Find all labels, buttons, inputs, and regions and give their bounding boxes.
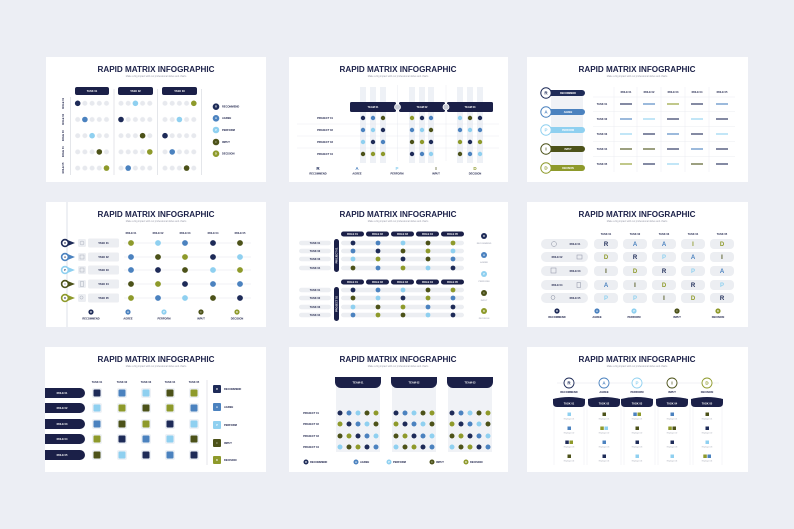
role circles	[560, 378, 713, 394]
legend pills	[541, 88, 585, 173]
legend: A	[215, 117, 217, 120]
legend pills: R	[544, 91, 548, 96]
task headers: TASK 01	[92, 380, 103, 384]
letter cells	[594, 239, 734, 303]
employee items: Employee 04	[632, 460, 642, 462]
legend: P	[395, 166, 399, 171]
legend: A	[483, 254, 485, 257]
legend: RECOMMEND	[477, 243, 492, 245]
letter cells: P	[662, 255, 666, 261]
employee items: Employee 01	[667, 418, 677, 420]
task headers	[601, 232, 728, 236]
title: RAPID MATRIX INFOGRAPHIC	[340, 355, 457, 364]
title: RAPID MATRIX INFOGRAPHIC	[98, 65, 215, 74]
role pills: ROLE 04	[552, 283, 563, 287]
legend: DECISION	[712, 315, 724, 319]
project labels: PROJECT 04	[303, 445, 319, 449]
letter cells: P	[633, 296, 637, 302]
letter cells: P	[720, 283, 724, 289]
legend: INPUT	[673, 315, 681, 319]
employee items: Employee 03	[702, 446, 712, 448]
pins and task labels: D	[64, 296, 66, 300]
task headers: TASK 02	[630, 232, 641, 236]
dot matrix	[74, 95, 197, 176]
legend: I	[216, 141, 217, 144]
task headers: TASK 02	[117, 380, 128, 384]
letter cells: R	[720, 296, 725, 302]
employee items: Employee 03	[632, 446, 642, 448]
legend	[82, 309, 243, 320]
project labels: PROJECT 03	[303, 434, 319, 438]
task headers: TASK 04	[688, 232, 699, 236]
employee items: Employee 01	[632, 418, 642, 420]
slide 3: line matrix with pill legend	[527, 57, 748, 182]
legend: INPUT	[432, 172, 440, 176]
legend: INPUT	[224, 441, 232, 445]
legend: R	[316, 166, 320, 171]
task headers	[553, 397, 723, 407]
legend: A	[127, 311, 129, 314]
pins and task labels: TASK 05	[98, 296, 109, 300]
employee items: Employee 01	[702, 418, 712, 420]
legend pills: DECISION	[562, 167, 574, 170]
legend: DECISION	[469, 172, 481, 176]
pins and task labels: R	[64, 241, 66, 245]
subtitle: Make a big impact with our professional slides and charts	[607, 75, 668, 78]
legend pills: I	[545, 147, 547, 152]
project 02 block: ROLE 01	[347, 280, 358, 284]
legend: I	[677, 310, 678, 313]
legend: AGREE	[224, 405, 233, 409]
slide 6: letter grid matrix	[527, 202, 748, 327]
project 02 block: ROLE 02	[372, 280, 383, 284]
slide 9: task columns with employees	[527, 347, 748, 472]
role pills: ROLE 01	[570, 242, 581, 246]
task headers: TASK 02	[130, 89, 141, 93]
legend: D	[236, 311, 238, 314]
role circles: INPUT	[668, 390, 676, 394]
project 01 block: ROLE 01	[347, 232, 358, 236]
project 01 block: TASK 04	[310, 266, 321, 270]
role circles: RECOMMEND	[560, 390, 578, 394]
task headers: TASK 03	[141, 380, 152, 384]
letter cells: I	[634, 283, 636, 289]
team headers: TEAM 02	[409, 380, 420, 384]
title: RAPID MATRIX INFOGRAPHIC	[98, 355, 215, 364]
subtitle: Make a big impact with our professional slides and charts	[126, 220, 187, 223]
title: RAPID MATRIX INFOGRAPHIC	[578, 355, 696, 364]
slide 7: square matrix with role bars	[45, 347, 266, 472]
task headers: TASK 02	[599, 402, 610, 406]
pins and task labels: P	[64, 268, 66, 272]
letter cells: D	[691, 296, 696, 302]
dots	[338, 410, 490, 450]
legend pills: RECOMMEND	[560, 92, 576, 95]
legend: P	[483, 273, 485, 276]
employee items: Employee 01	[564, 418, 574, 420]
task headers: TASK 01	[601, 232, 612, 236]
legend: D	[215, 153, 217, 156]
employee items: Employee 02	[667, 432, 677, 434]
task headers: TASK 05	[717, 232, 728, 236]
legend: INPUT	[481, 300, 488, 302]
task headers	[92, 380, 200, 384]
legend: R	[483, 235, 485, 238]
project labels: PROJECT 02	[317, 128, 333, 132]
legend: D	[473, 166, 477, 171]
legend: R	[305, 461, 307, 464]
project 02 block	[299, 280, 464, 321]
legend: PERFORM	[393, 460, 406, 464]
pins and task labels: A	[64, 255, 66, 259]
pins and task labels: TASK 04	[98, 282, 109, 286]
table headers: TASK 05	[597, 162, 608, 166]
letter cells: D	[604, 255, 609, 261]
letter cells: A	[604, 283, 609, 289]
legend: INPUT	[197, 316, 205, 320]
subtitle: Make a big impact with our professional slides and charts	[368, 220, 429, 223]
legend: I	[217, 442, 218, 445]
legend: PERFORM	[391, 172, 403, 176]
title: RAPID MATRIX INFOGRAPHIC	[578, 210, 696, 219]
letter cells: I	[692, 242, 694, 248]
project labels: PROJECT 01	[303, 411, 319, 415]
legend	[213, 103, 239, 157]
legend pills: PERFORM	[562, 129, 574, 132]
task headers: TASK 04	[165, 380, 176, 384]
role circles: P	[635, 381, 639, 386]
role bars: ROLE 01	[57, 391, 68, 395]
dots	[361, 116, 482, 156]
role labels: ROLE 02	[61, 113, 65, 125]
line markers	[620, 104, 728, 164]
project 01 block: ROLE 04	[422, 232, 433, 236]
legend: AGREE	[123, 316, 133, 320]
task headers: TASK 01	[564, 402, 575, 406]
slide 4: pin markers dot matrix	[46, 202, 266, 327]
project 01 block: TASK 01	[310, 241, 321, 245]
legend: RECOMMEND	[310, 460, 327, 464]
legend: I	[432, 461, 433, 464]
legend: RECOMMEND	[548, 315, 566, 319]
pins and task labels: TASK 01	[98, 241, 109, 245]
role circles: R	[567, 381, 571, 386]
task headers: TASK 01	[87, 89, 98, 93]
legend: AGREE	[222, 116, 231, 120]
legend: RECOMMEND	[222, 105, 239, 109]
role bars: ROLE 04	[57, 437, 68, 441]
legend: PERFORM	[224, 423, 237, 427]
employee items: Employee 04	[702, 460, 712, 462]
legend	[309, 166, 481, 176]
role headers	[126, 231, 246, 235]
team headers	[335, 377, 493, 388]
legend: D	[717, 310, 719, 313]
role circles: D	[705, 381, 709, 386]
legend: INPUT	[436, 460, 444, 464]
legend: R	[216, 388, 218, 391]
team headers: TEAM 01	[353, 380, 364, 384]
legend: RECOMMEND	[309, 172, 327, 176]
subtitle: Make a big impact with our professional slides and charts	[126, 365, 187, 368]
legend: R	[556, 310, 558, 313]
role labels: ROLE 03	[61, 130, 65, 141]
team headers	[350, 102, 493, 112]
title: RAPID MATRIX INFOGRAPHIC	[340, 65, 457, 74]
title: RAPID MATRIX INFOGRAPHIC	[340, 210, 457, 219]
task headers: TASK 05	[702, 402, 713, 406]
project labels	[303, 411, 319, 449]
pins and task labels: TASK 02	[98, 255, 109, 259]
legend: A	[355, 166, 359, 171]
project 02 block: ROLE 03	[397, 280, 408, 284]
role pills: ROLE 05	[570, 296, 581, 300]
table headers: TASK 02	[597, 117, 608, 121]
legend: D	[465, 461, 467, 464]
legend pills: AGREE	[564, 111, 573, 114]
task headers: TASK 03	[632, 402, 643, 406]
project 02 block: ROLE 04	[422, 280, 433, 284]
project 02 block: TASK 04	[310, 313, 321, 317]
role bars	[45, 388, 85, 460]
letter cells: A	[633, 242, 638, 248]
legend: PERFORM	[158, 316, 170, 320]
project 01 block: PROJECT 01	[334, 247, 338, 263]
slide 5: two project letter matrices	[289, 202, 508, 327]
pins and task labels	[61, 238, 119, 302]
legend: D	[483, 310, 485, 313]
legend	[213, 385, 241, 464]
pins and task labels: I	[65, 282, 66, 286]
employee items: Employee 02	[564, 432, 574, 434]
letter cells: P	[604, 296, 608, 302]
table headers: ROLE 04	[692, 90, 703, 94]
employee items: Employee 04	[564, 460, 574, 462]
legend: PERFORM	[628, 315, 640, 319]
legend: P	[215, 129, 217, 132]
legend: RECOMMEND	[82, 316, 100, 320]
role bars: ROLE 03	[57, 422, 68, 426]
subtitle: Make a big impact with our professional slides and charts	[126, 75, 187, 78]
legend: INPUT	[222, 140, 230, 144]
legend pills: A	[544, 110, 548, 115]
role labels	[61, 97, 65, 173]
legend: PERFORM	[222, 128, 235, 132]
role headers: ROLE 03	[180, 231, 191, 235]
legend: DECISION	[479, 318, 490, 320]
role labels: ROLE 04	[61, 146, 65, 157]
role headers: ROLE 01	[126, 231, 137, 235]
letter cells: D	[662, 283, 667, 289]
role circles: DECISION	[701, 390, 713, 394]
legend: P	[163, 311, 165, 314]
project labels: PROJECT 02	[303, 422, 319, 426]
letter cells: R	[691, 283, 696, 289]
legend pills: INPUT	[564, 148, 572, 151]
employee items: Employee 03	[667, 446, 677, 448]
legend: A	[355, 461, 357, 464]
legend: AGREE	[592, 315, 602, 319]
letter cells: R	[604, 242, 609, 248]
legend: I	[484, 292, 485, 295]
project 02 block: TASK 01	[310, 288, 321, 292]
project 02 block: ROLE 05	[447, 280, 458, 284]
role pills	[541, 239, 588, 303]
subtitle: Make a big impact with our professional slides and charts	[368, 75, 429, 78]
employee items: Employee 02	[599, 432, 609, 434]
role headers: ROLE 02	[153, 231, 164, 235]
project labels: PROJECT 01	[317, 116, 333, 120]
task headers: TASK 05	[189, 380, 200, 384]
employee items	[564, 412, 712, 462]
project 01 block: TASK 02	[310, 249, 321, 253]
legend: R	[90, 311, 92, 314]
legend: I	[435, 166, 437, 171]
task headers: TASK 03	[659, 232, 670, 236]
team headers: TEAM 02	[417, 105, 428, 109]
employee items: Employee 01	[599, 418, 609, 420]
legend: AGREE	[480, 261, 488, 264]
letter cells: R	[633, 255, 638, 261]
legend: R	[215, 106, 217, 109]
legend: I	[201, 311, 202, 314]
legend	[304, 460, 483, 464]
letter cells: D	[633, 269, 638, 275]
project 01 block	[299, 232, 464, 272]
legend: AGREE	[360, 460, 369, 464]
legend: DECISION	[470, 460, 483, 464]
table headers: TASK 03	[597, 132, 608, 136]
squares	[92, 388, 199, 460]
letter cells: D	[720, 242, 725, 248]
legend: D	[216, 459, 218, 462]
project 01 block: ROLE 05	[447, 232, 458, 236]
employee items: Employee 02	[632, 432, 642, 434]
project labels: PROJECT 04	[317, 152, 333, 156]
project 01 block: ROLE 02	[372, 232, 383, 236]
team headers: TEAM 03	[465, 380, 476, 384]
employee items: Employee 03	[599, 446, 609, 448]
role headers: ROLE 04	[208, 231, 219, 235]
employee items: Employee 03	[564, 446, 574, 448]
legend: RECOMMEND	[224, 387, 241, 391]
column backgrounds	[360, 87, 483, 163]
letter cells: A	[662, 242, 667, 248]
slide 1: task role dot matrix	[46, 57, 266, 182]
slide 2: team project matrix	[289, 57, 508, 182]
role labels: ROLE 01	[61, 97, 65, 109]
role circles: I	[671, 381, 673, 386]
letter cells: R	[662, 269, 667, 275]
employee items: Employee 04	[599, 460, 609, 462]
letter cells: I	[605, 269, 607, 275]
title: RAPID MATRIX INFOGRAPHIC	[98, 210, 215, 219]
table headers	[597, 90, 728, 166]
team headers: TEAM 01	[368, 105, 379, 109]
task headers: TASK 04	[667, 402, 678, 406]
project 02 block: PROJECT 02	[334, 296, 338, 312]
legend: PERFORM	[479, 281, 490, 283]
subtitle: Make a big impact with our professional slides and charts	[607, 365, 668, 368]
project 02 block: TASK 03	[310, 305, 321, 309]
legend: A	[596, 310, 598, 313]
role pills: ROLE 03	[570, 269, 581, 273]
employee items: Employee 04	[667, 460, 677, 462]
employee items: Employee 02	[702, 432, 712, 434]
role bars: ROLE 05	[57, 453, 68, 457]
table headers: TASK 04	[597, 147, 608, 151]
role circles: A	[602, 381, 606, 386]
table headers: TASK 01	[597, 102, 608, 106]
role circles: PERFORM	[631, 390, 643, 394]
legend: DECISION	[222, 152, 235, 156]
legend: P	[388, 461, 390, 464]
dots	[128, 240, 243, 301]
project 01 block: TASK 03	[310, 257, 321, 261]
team headers: TEAM 03	[465, 105, 476, 109]
legend: AGREE	[352, 172, 362, 176]
task headers	[75, 87, 197, 95]
legend pills: D	[544, 166, 548, 171]
project labels: PROJECT 03	[317, 140, 333, 144]
slide 8: three team dot matrix	[289, 347, 508, 472]
project 02 block: TASK 02	[310, 296, 321, 300]
role labels: ROLE 05	[61, 162, 65, 173]
role pills: ROLE 02	[552, 255, 563, 259]
legend: P	[216, 424, 218, 427]
letter cells: A	[720, 269, 725, 275]
legend: DECISION	[231, 316, 243, 320]
table headers: ROLE 03	[668, 90, 679, 94]
role headers: ROLE 05	[235, 231, 246, 235]
letter cells: I	[721, 255, 723, 261]
title: RAPID MATRIX INFOGRAPHIC	[578, 65, 696, 74]
legend: P	[633, 310, 635, 313]
letter cells: I	[663, 296, 665, 302]
task headers: TASK 03	[174, 89, 185, 93]
table headers: ROLE 02	[644, 90, 655, 94]
letter cells: P	[691, 269, 695, 275]
table headers: ROLE 01	[621, 90, 632, 94]
legend: A	[216, 406, 218, 409]
project 01 block: ROLE 03	[397, 232, 408, 236]
legend pills: P	[544, 128, 548, 133]
legend	[548, 308, 724, 319]
pins and task labels: TASK 03	[98, 268, 109, 272]
role bars: ROLE 02	[57, 406, 68, 410]
legend	[477, 233, 492, 320]
subtitle: Make a big impact with our professional slides and charts	[607, 220, 668, 223]
project labels	[317, 116, 333, 156]
subtitle: Make a big impact with our professional slides and charts	[368, 365, 429, 368]
table headers: ROLE 05	[717, 90, 728, 94]
legend: DECISION	[224, 458, 237, 462]
role circles: AGREE	[599, 390, 609, 394]
letter cells: A	[691, 255, 696, 261]
